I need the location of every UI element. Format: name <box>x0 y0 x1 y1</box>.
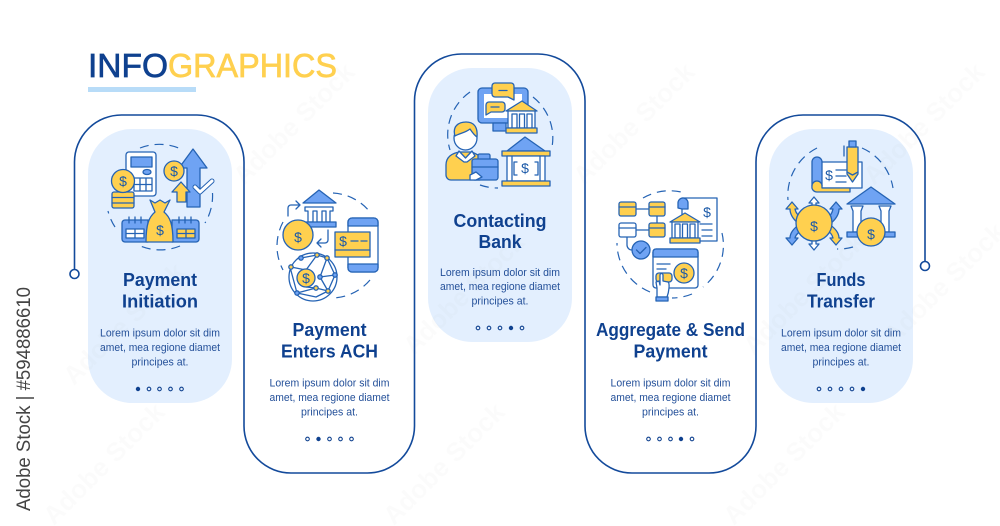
stock watermarks: Adobe Stock <box>397 226 531 360</box>
stock watermarks: Adobe Stock <box>857 56 991 190</box>
panel: funds transfer <box>781 141 901 391</box>
step dots <box>476 326 524 330</box>
icon: person and bank: $ <box>521 160 529 176</box>
icon: payment initiation: $ <box>170 163 178 179</box>
heading: Enters ACH <box>281 340 378 362</box>
icon: check, coin and bank: $ <box>867 226 875 242</box>
panel: aggregate and send payment <box>596 191 745 441</box>
body text <box>100 328 220 368</box>
step dots <box>647 437 694 441</box>
icon: payment initiation: $ <box>156 222 164 238</box>
body text: amet, mea regione diamet <box>100 342 220 354</box>
panel backgrounds <box>88 68 913 403</box>
icon: flow chart, bank and browser <box>617 191 723 301</box>
heading: Transfer <box>807 290 875 312</box>
heading: Payment <box>123 269 197 290</box>
body text: Lorem ipsum dolor sit dim <box>610 378 730 390</box>
stock watermarks: Adobe Stock <box>567 56 701 190</box>
heading <box>454 210 546 252</box>
step dots <box>306 437 353 441</box>
panel: contacting bank <box>440 83 560 330</box>
heading: Payment <box>634 340 708 362</box>
heading <box>596 319 745 362</box>
icon: bank, card and network <box>277 190 378 301</box>
icon: check, coin and bank: $ <box>825 167 833 183</box>
heading <box>281 319 378 362</box>
heading: Contacting <box>454 210 546 231</box>
body text <box>440 267 560 308</box>
heading: Initiation <box>122 290 198 312</box>
icon: flow chart, bank and browser: $ <box>703 204 711 220</box>
body text <box>781 328 901 368</box>
panel: payment enters ach <box>270 190 390 441</box>
body text: Lorem ipsum dolor sit dim <box>270 378 390 390</box>
icon: payment initiation <box>108 144 213 250</box>
heading <box>807 269 875 312</box>
side credit: Adobe Stock | #594886610 <box>14 287 35 511</box>
title: INFO <box>88 47 168 84</box>
icon: bank, card and network: $ <box>302 270 310 286</box>
body text: Lorem ipsum dolor sit dim <box>100 328 220 340</box>
step dots <box>136 387 183 391</box>
heading: Payment <box>292 319 366 340</box>
body text: Lorem ipsum dolor sit dim <box>440 267 560 279</box>
body text: Lorem ipsum dolor sit dim <box>781 328 901 340</box>
title <box>88 47 337 84</box>
title underline <box>88 87 196 92</box>
heading: Bank <box>478 231 522 252</box>
body text: principes at. <box>472 296 528 308</box>
body text: amet, mea regione diamet <box>610 392 730 404</box>
heading <box>122 269 198 312</box>
stock watermarks: Adobe Stock <box>227 56 361 190</box>
body text: amet, mea regione diamet <box>781 342 901 354</box>
icon: flow chart, bank and browser: $ <box>680 265 688 281</box>
icon: check, coin and bank <box>786 141 895 250</box>
heading: Aggregate & Send <box>596 319 745 340</box>
panel: payment initiation <box>100 144 220 391</box>
body text <box>270 378 390 418</box>
icon: payment initiation: $ <box>119 173 127 189</box>
title: GRAPHICS <box>168 47 337 84</box>
icon: bank, card and network: $ <box>294 229 302 245</box>
icon: check, coin and bank: $ <box>810 218 818 234</box>
body text: principes at. <box>132 356 188 368</box>
body text: amet, mea regione diamet <box>440 281 560 293</box>
heading: Funds <box>816 269 866 290</box>
body text: principes at. <box>301 406 358 418</box>
step dots <box>817 387 865 391</box>
body text <box>610 378 730 418</box>
connected outline <box>70 54 930 473</box>
body text: amet, mea regione diamet <box>270 392 390 404</box>
body text: principes at. <box>642 406 699 418</box>
stock watermarks: Adobe Stock <box>57 256 191 390</box>
icon: bank, card and network: $ <box>339 233 347 249</box>
body text: principes at. <box>812 356 870 368</box>
icon: person and bank <box>446 83 553 188</box>
stock watermarks: Adobe Stock <box>737 226 871 360</box>
